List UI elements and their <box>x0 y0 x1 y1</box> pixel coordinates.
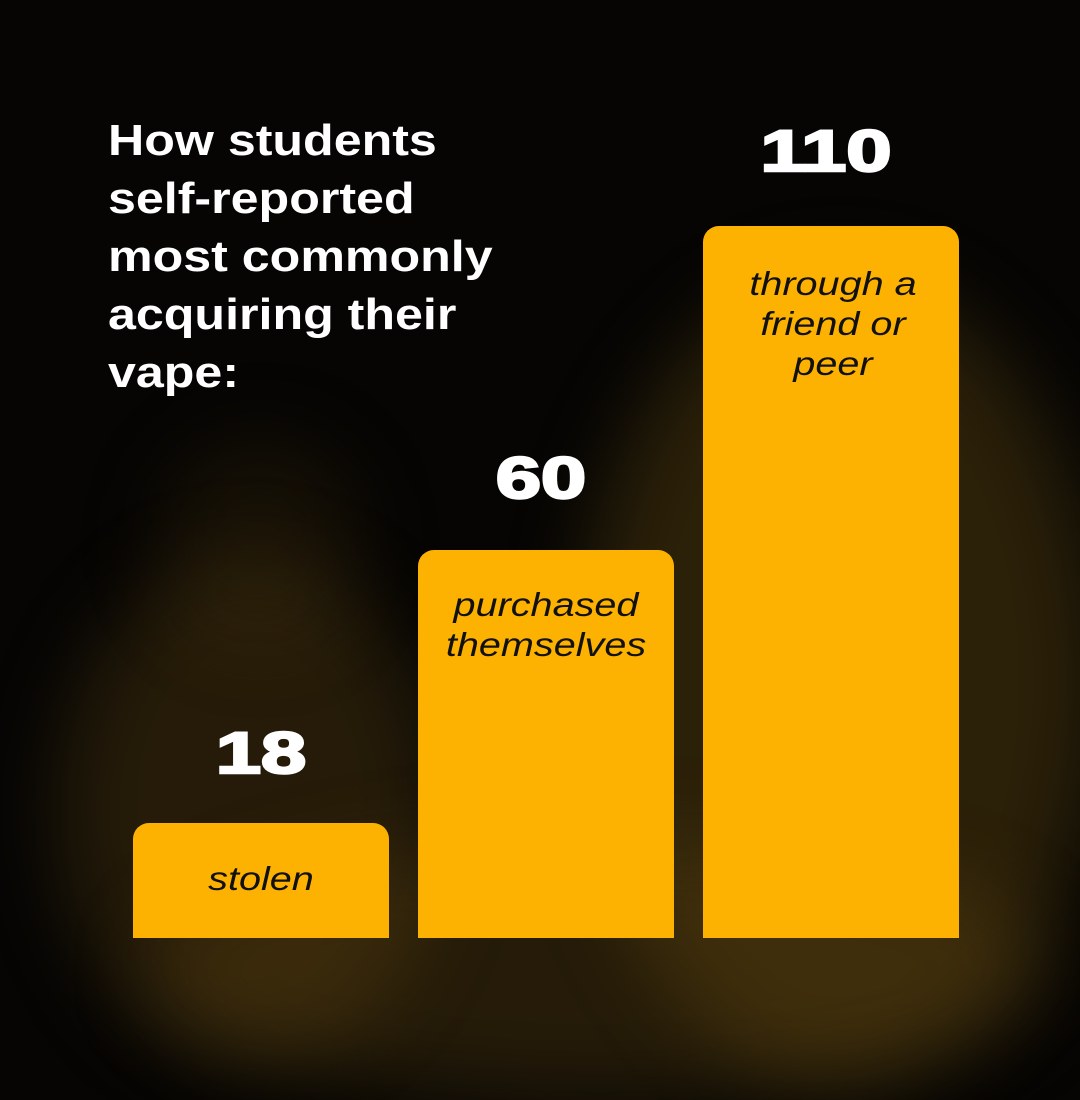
bar: stolen <box>133 823 389 938</box>
title: vape: <box>108 348 239 397</box>
value: 18: 18 <box>216 721 306 786</box>
value: 110: 110 <box>760 119 891 184</box>
title <box>108 116 493 397</box>
bar: through a friend or peer: peer <box>793 345 873 382</box>
title: How students <box>108 116 437 165</box>
bar: through a friend or peer: friend or <box>760 305 906 342</box>
bar: purchased themselves <box>418 550 674 938</box>
title: acquiring their <box>108 290 456 339</box>
title: most commonly <box>108 232 493 281</box>
bar: purchased themselves: themselves <box>446 626 646 663</box>
value: 60: 60 <box>496 446 586 511</box>
bar: purchased themselves: purchased <box>454 586 638 623</box>
title: self-reported <box>108 174 415 223</box>
bar: through a friend or peer: through a <box>749 265 917 302</box>
bar chart <box>133 119 959 938</box>
bar: stolen: stolen <box>208 860 314 897</box>
bar: through a friend or peer <box>703 226 959 938</box>
